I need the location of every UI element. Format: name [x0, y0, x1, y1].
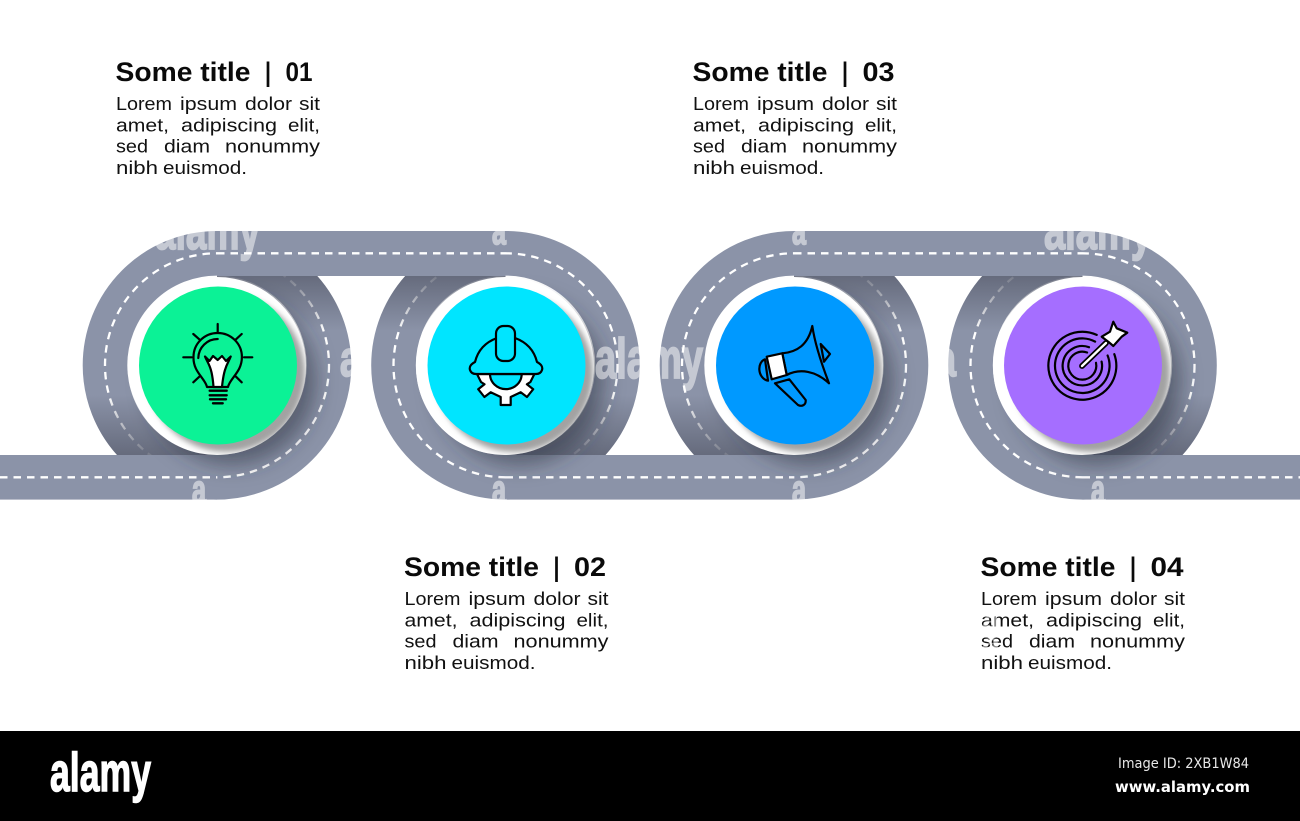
- body text: sed: [981, 632, 1013, 652]
- road loop centre dashes: [105, 253, 1194, 477]
- footer logo: alamy: [50, 741, 151, 803]
- white disc: [705, 277, 883, 455]
- body text: sit: [876, 94, 897, 114]
- blue circle: [716, 286, 874, 444]
- body text: [693, 94, 897, 178]
- body text: ipsum: [468, 589, 526, 609]
- body text: ipsum: [757, 94, 814, 114]
- body text: Lorem: [404, 589, 460, 609]
- body text: euismod.: [163, 158, 247, 178]
- body text: dolor: [1110, 589, 1157, 609]
- road loop rings: [105, 253, 1194, 477]
- body text: sit: [588, 589, 608, 609]
- watermarks: a: [492, 209, 506, 253]
- step 1 node: [128, 277, 306, 455]
- body text: nibh: [116, 158, 158, 178]
- heading: 04: [1150, 552, 1184, 582]
- body text: diam: [1029, 632, 1075, 652]
- heading: 01: [286, 57, 312, 87]
- body text: amet,: [404, 610, 458, 630]
- body text: adipiscing: [181, 115, 277, 135]
- body text: ipsum: [1045, 589, 1102, 609]
- disc inner shadow: [435, 294, 593, 452]
- body text: nonummy: [225, 137, 320, 157]
- body text: [116, 94, 320, 178]
- footer bar: [0, 731, 1300, 821]
- heading: Some title: [116, 57, 250, 87]
- body text: diam: [452, 632, 498, 652]
- white disc: [993, 277, 1171, 455]
- body text: dolor: [245, 94, 292, 114]
- body text: amet,: [116, 115, 169, 135]
- body text: sed: [693, 137, 725, 157]
- body text: dolor: [534, 589, 580, 609]
- body text: nibh: [981, 653, 1023, 673]
- cyan circle: [428, 286, 586, 444]
- step 4 node: [993, 277, 1171, 455]
- body text: ipsum: [180, 94, 237, 114]
- icon: megaphone: [759, 326, 830, 406]
- body text: elit,: [1153, 610, 1185, 630]
- body text: dolor: [822, 94, 869, 114]
- icon: light bulb: [183, 324, 252, 403]
- text block: step 04: [980, 552, 1185, 673]
- green circle: [139, 286, 297, 444]
- heading: |: [842, 57, 848, 87]
- body text: Lorem: [981, 589, 1037, 609]
- heading: |: [1130, 552, 1136, 582]
- watermarks: [155, 199, 1152, 655]
- white disc: [416, 277, 594, 455]
- watermarks: a: [340, 331, 361, 387]
- text block: step 02: [404, 552, 608, 673]
- road: winding path with four loops: [0, 231, 1300, 500]
- road straight section dashes: [0, 253, 1300, 477]
- body text: [404, 589, 608, 673]
- body text: nonummy: [802, 137, 897, 157]
- disc inner shadow: [1012, 294, 1170, 452]
- watermarks: a: [792, 209, 806, 253]
- body text: adipiscing: [758, 115, 854, 135]
- body text: diam: [741, 137, 787, 157]
- body text: amet,: [693, 115, 746, 135]
- body text: sit: [299, 94, 320, 114]
- body text: sed: [404, 632, 436, 652]
- watermarks: a: [982, 630, 1001, 655]
- body text: Lorem: [116, 94, 172, 114]
- heading: 02: [574, 552, 606, 582]
- heading: |: [554, 552, 560, 582]
- website: www.alamy.com: [1115, 778, 1250, 796]
- heading: Some title: [404, 552, 539, 582]
- body text: diam: [164, 137, 210, 157]
- body text: elit,: [288, 115, 320, 135]
- body text: adipiscing: [1046, 610, 1142, 630]
- watermarks: a: [492, 468, 506, 512]
- body text: euismod.: [452, 653, 536, 673]
- body text: elit,: [576, 610, 608, 630]
- body text: adipiscing: [470, 610, 566, 630]
- image id: Image ID: 2XB1W84: [1118, 756, 1249, 772]
- body text: [981, 589, 1185, 673]
- watermarks: a: [1091, 468, 1105, 512]
- body text: euismod.: [740, 158, 824, 178]
- body text: elit,: [865, 115, 897, 135]
- text block: step 01: [116, 57, 320, 178]
- watermarks: a: [982, 608, 1001, 633]
- heading: Some title: [692, 57, 828, 87]
- disc inner shadow: [147, 294, 305, 452]
- watermarks: a: [936, 331, 957, 387]
- body text: Lorem: [693, 94, 749, 114]
- watermarks: a: [792, 468, 806, 512]
- body text: amet,: [981, 610, 1034, 630]
- road underpass shading: [77, 276, 1222, 455]
- heading: 03: [862, 57, 894, 87]
- watermarks: alamy: [155, 199, 260, 261]
- disc inner shadow: [724, 294, 882, 452]
- body text: sed: [116, 137, 148, 157]
- white disc: [128, 277, 306, 455]
- watermarks: alamy: [595, 327, 703, 391]
- icon: target with arrow: [1048, 322, 1127, 400]
- purple circle: [1004, 286, 1162, 444]
- heading: |: [265, 57, 271, 87]
- watermarks: alamy: [1044, 199, 1152, 261]
- disc shadows on road: [148, 297, 1181, 465]
- body text: nonummy: [514, 632, 608, 652]
- body text: sit: [1164, 589, 1185, 609]
- icon: helmet and gear: [470, 326, 542, 405]
- body text: nibh: [404, 653, 446, 673]
- body text: euismod.: [1028, 653, 1112, 673]
- road straight sections: [0, 231, 1300, 500]
- text block: step 03: [692, 57, 897, 178]
- heading: Some title: [980, 552, 1116, 582]
- body text: nibh: [693, 158, 735, 178]
- step 2 node: [416, 277, 594, 455]
- watermarks: a: [192, 468, 206, 512]
- step 3 node: [705, 277, 883, 455]
- body text: nonummy: [1090, 632, 1185, 652]
